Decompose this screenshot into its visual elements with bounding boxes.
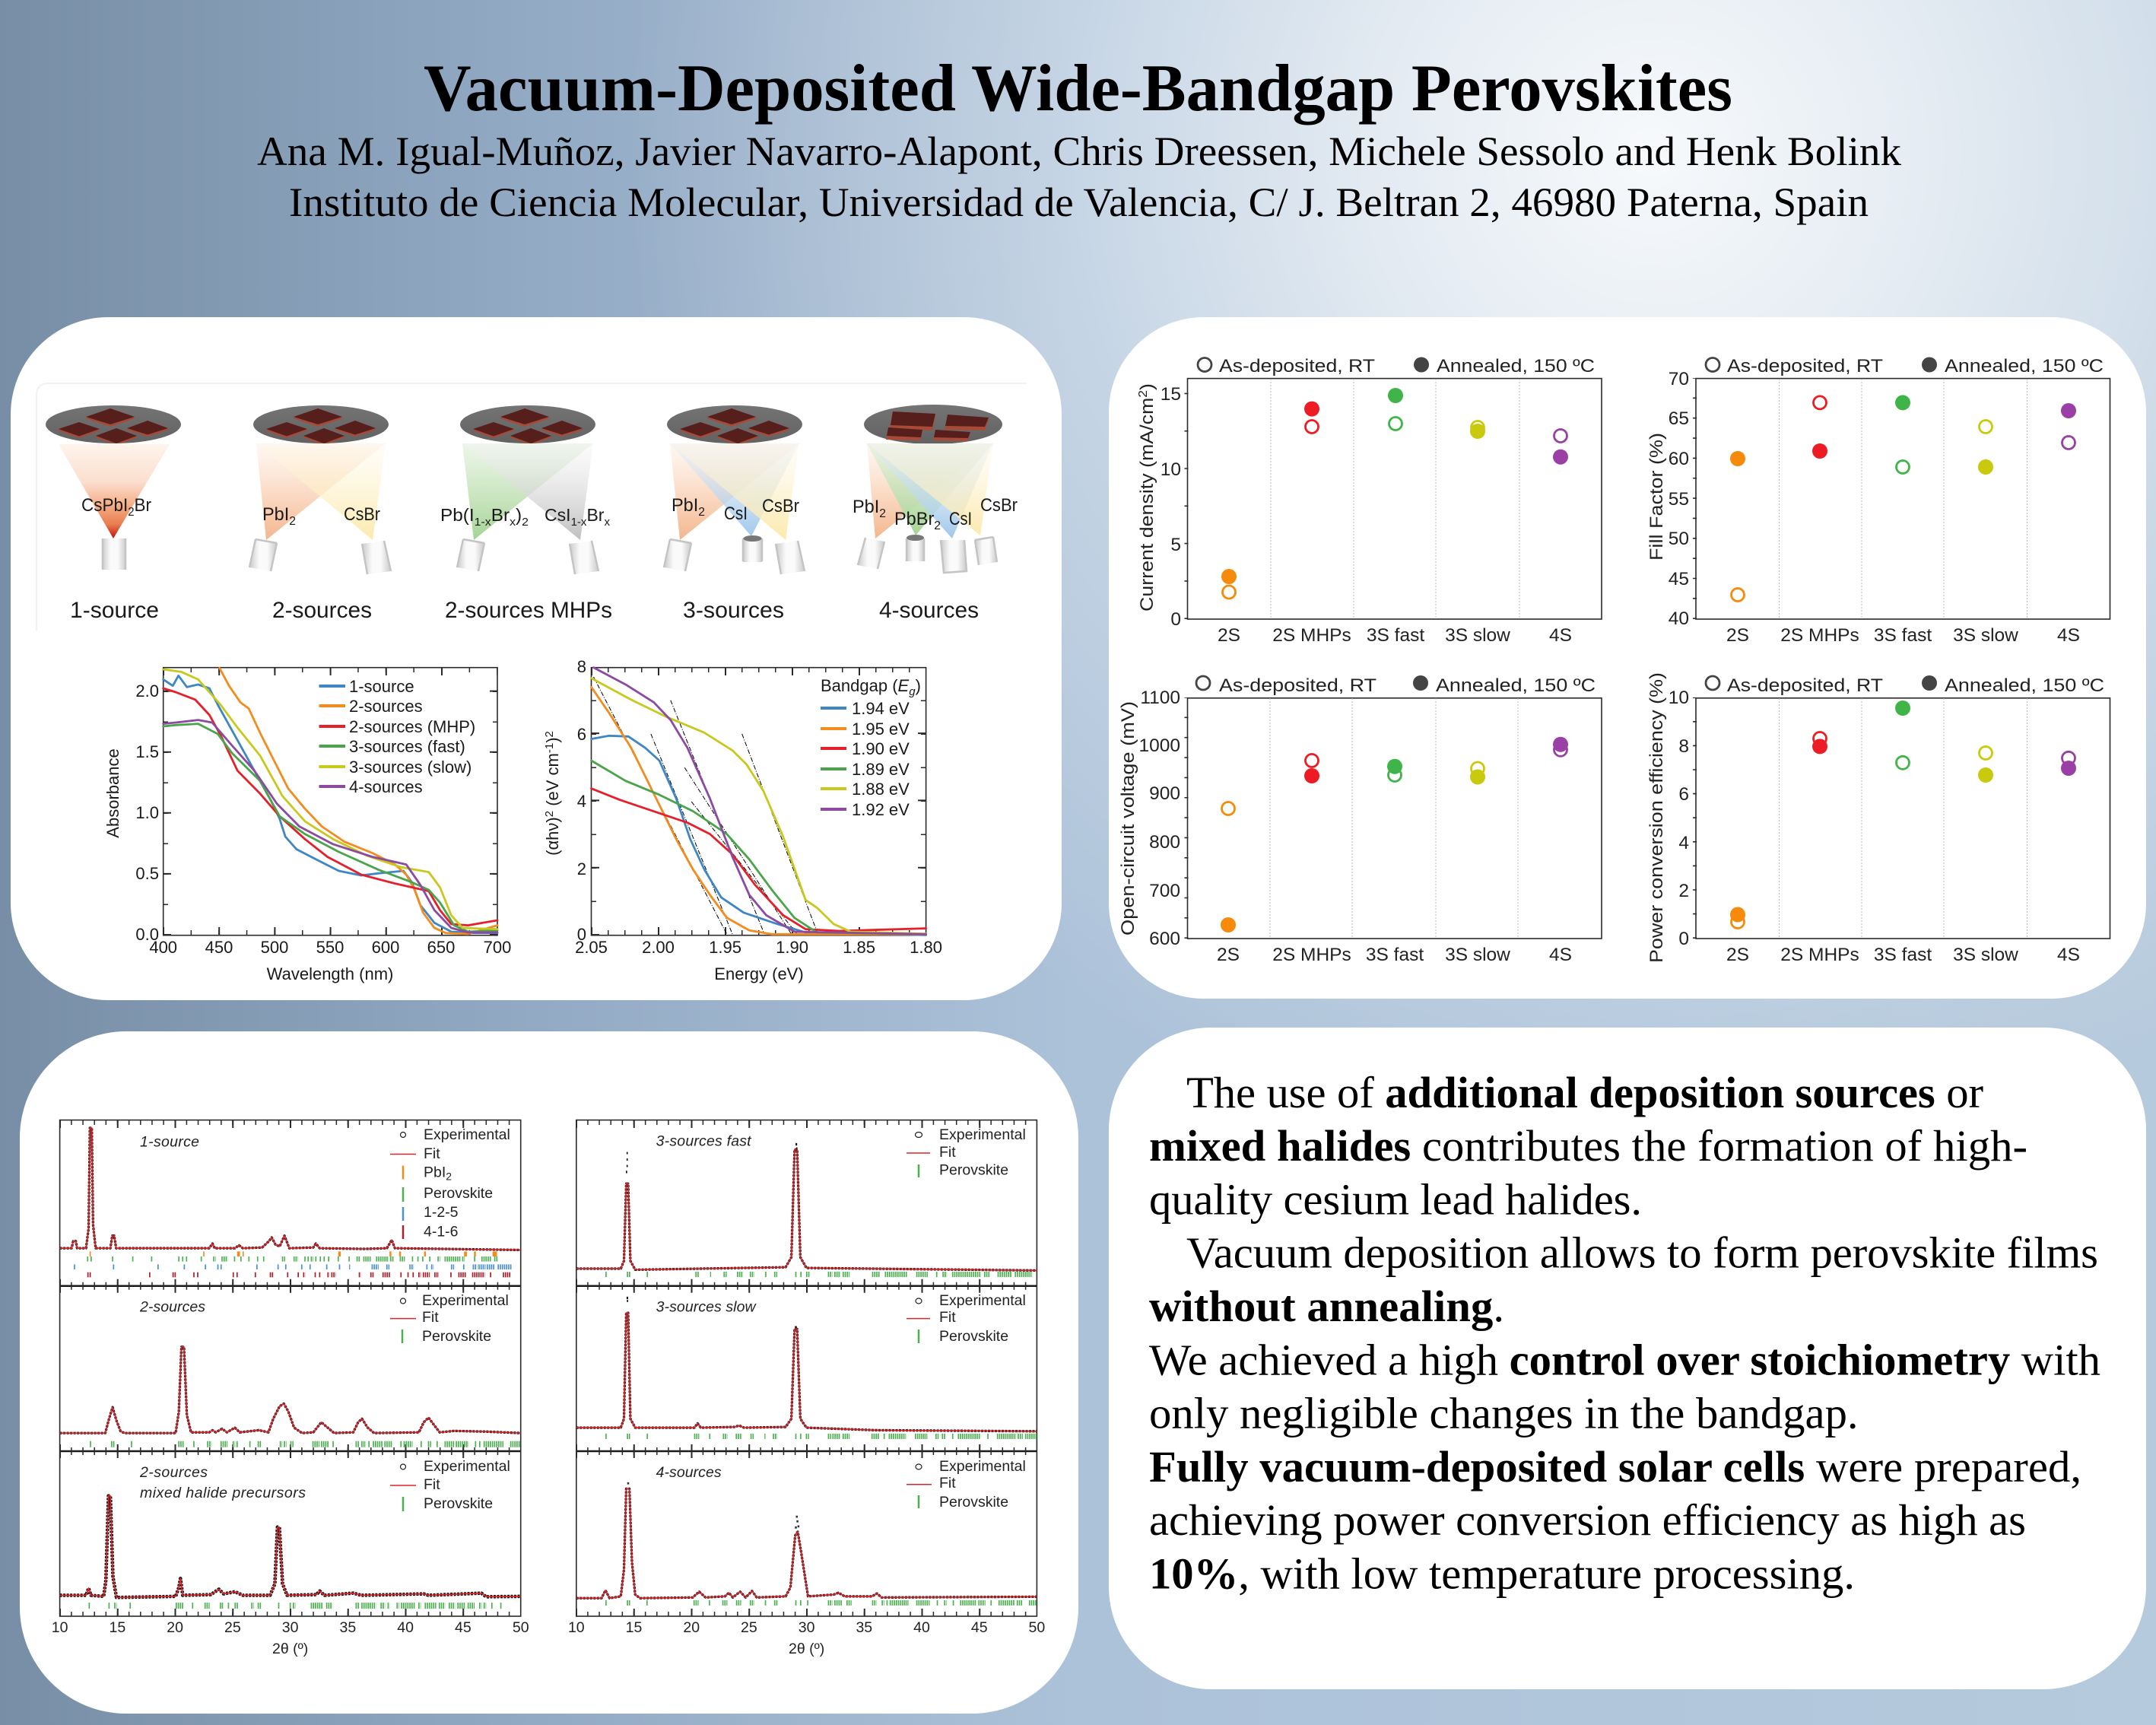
schematic: 1-source: 2 — [128, 506, 135, 519]
authors: Ana M. Igual-Muñoz, Javier Navarro-Alapont, Chris Dreessen, Michele Sessolo and Henk Bolink — [257, 129, 1901, 174]
XRD left labels and legends: 30 — [282, 1619, 299, 1636]
chart: open-circuit voltage — [1118, 675, 1602, 965]
pattern: 2-sources — [60, 1347, 521, 1444]
text block: conclusions: quality cesium lead halides. — [1149, 1174, 1642, 1225]
chart: absorbance vs wavelength: 0.0 — [135, 925, 159, 944]
XRD left labels and legends: mixed halide precursors — [140, 1485, 306, 1501]
chart: current density: As-deposited, RT — [1219, 356, 1375, 376]
text block: conclusions: We achieved a high control over stoichiometry with — [1149, 1336, 2100, 1384]
chart: fill factor: 45 — [1669, 569, 1689, 589]
chart: current density: 4S — [1549, 625, 1572, 646]
chart: open-circuit voltage: Open-circuit voltage (mV) — [1118, 701, 1138, 936]
chart: current density: Current density (mA/cm — [1137, 416, 1157, 612]
panel: conclusions text — [1109, 1028, 2146, 1689]
legend: bandgap: Bandgap (E — [821, 676, 909, 695]
chart: Tauc plot: (αhν) — [543, 817, 562, 856]
chart: current density: 5 — [1170, 535, 1181, 555]
chart: open-circuit voltage: 700 — [1149, 881, 1180, 901]
XRD right labels and legends: Perovskite — [939, 1161, 1008, 1178]
legend: absorbance: 1-source — [349, 677, 414, 696]
chart: fill factor: 65 — [1669, 408, 1689, 429]
XRD right labels and legends: Fit — [939, 1475, 956, 1492]
XRD left labels and legends: 2-sources — [139, 1299, 205, 1316]
pattern: 1-source — [60, 1128, 521, 1275]
chart: current density: 2S MHPs — [1272, 625, 1351, 646]
chart: power conversion efficiency: 3S fast — [1874, 945, 1932, 965]
chart: fill factor: 70 — [1669, 369, 1689, 389]
panel: device performance — [1109, 317, 2146, 999]
chart: absorbance vs wavelength: 650 — [427, 938, 455, 957]
chart: power conversion efficiency: 2S MHPs — [1780, 945, 1859, 965]
legend: bandgap: 1.89 eV — [852, 760, 910, 779]
chart: power conversion efficiency: 0 — [1678, 929, 1689, 949]
chart: fill factor: 55 — [1669, 489, 1689, 510]
schematic: 2-sources MHPs — [440, 405, 612, 623]
chart: fill factor: 50 — [1669, 529, 1689, 549]
chart: absorbance vs wavelength — [103, 668, 511, 983]
XRD right labels and legends: 25 — [741, 1619, 757, 1636]
text block: conclusions: achieving power conversion efficiency as high as — [1149, 1495, 2026, 1545]
chart: power conversion efficiency: 6 — [1678, 784, 1689, 805]
chart: absorbance vs wavelength: 400 — [149, 938, 177, 957]
chart: absorbance vs wavelength: 1.5 — [135, 742, 159, 761]
schematic: 3-sources — [664, 405, 805, 623]
XRD right labels and legends: 4-sources — [656, 1464, 722, 1481]
chart: power conversion efficiency: As-deposited, RT — [1727, 675, 1883, 696]
chart: absorbance vs wavelength: Wavelength (nm) — [267, 964, 393, 983]
legend: bandgap: 1.94 eV — [852, 699, 910, 718]
pattern: 4-sources — [576, 1482, 1037, 1603]
chart: current density: Annealed, 150 ºC — [1437, 356, 1595, 376]
chart: Tauc plot: 1.85 — [843, 938, 875, 957]
schematic: 1-source: CsPbI — [81, 495, 131, 516]
chart: power conversion efficiency: 4S — [2057, 945, 2080, 965]
XRD left labels and legends: PbI — [424, 1164, 446, 1181]
chart: open-circuit voltage: 800 — [1149, 832, 1180, 853]
XRD left labels and legends: 2-sources — [139, 1464, 208, 1481]
schematic: 3-sources: 2 — [698, 506, 705, 519]
chart: Tauc plot — [543, 657, 942, 983]
chart: open-circuit voltage: 1000 — [1138, 735, 1180, 756]
chart: open-circuit voltage: 2S MHPs — [1272, 945, 1351, 965]
chart: open-circuit voltage: 1100 — [1140, 688, 1180, 708]
XRD left labels and legends: 1-2-5 — [424, 1204, 459, 1221]
chart: fill factor: Fill Factor (%) — [1646, 433, 1667, 561]
chart: current density: ) — [1137, 383, 1157, 390]
chart: open-circuit voltage: Annealed, 150 ºC — [1436, 675, 1596, 696]
text block: conclusions: 10%, with low temperature processing. — [1149, 1549, 1855, 1599]
chart: XRD right column — [568, 1120, 1045, 1657]
chart: power conversion efficiency: 4 — [1678, 833, 1689, 853]
chart: fill factor: 60 — [1669, 449, 1689, 469]
chart: Tauc plot: 4 — [577, 792, 586, 811]
chart: current density — [1137, 356, 1602, 646]
chart: power conversion efficiency: 10 — [1669, 688, 1689, 708]
chart: current density: 3S fast — [1367, 625, 1424, 646]
XRD left labels and legends: Fit — [422, 1309, 439, 1326]
schematic: 2-sources: PbI — [262, 504, 290, 525]
XRD right labels and legends: 45 — [971, 1619, 988, 1636]
chart: absorbance vs wavelength: 550 — [316, 938, 344, 957]
chart: current density: 2 — [1137, 390, 1150, 398]
schematic: 2-sources MHPs: Pb(I — [440, 505, 472, 525]
chart: current density: 3S slow — [1445, 625, 1510, 646]
XRD left labels and legends: 1-source — [140, 1134, 199, 1151]
schematic: 2-sources MHPs: Br — [586, 505, 605, 525]
chart: fill factor: Annealed, 150 ºC — [1945, 356, 2104, 376]
XRD left labels and legends: 50 — [513, 1619, 529, 1636]
XRD right labels and legends: 3-sources slow — [656, 1299, 757, 1316]
chart: Tauc plot: 1.90 — [776, 938, 808, 957]
chart: open-circuit voltage: 2S — [1217, 945, 1240, 965]
chart: open-circuit voltage: 900 — [1149, 783, 1180, 804]
schematic: 2-sources MHPs: x — [510, 516, 516, 529]
XRD right labels and legends — [568, 1126, 1045, 1657]
chart: power conversion efficiency: 3S slow — [1953, 945, 2018, 965]
chart: Tauc plot: 1.95 — [709, 938, 741, 957]
XRD right labels and legends: 35 — [856, 1619, 872, 1636]
chart: Tauc plot: (eV cm — [543, 753, 562, 811]
chart: power conversion efficiency: Power conversion efficiency (%) — [1646, 672, 1667, 963]
XRD left labels and legends: Perovskite — [424, 1495, 493, 1512]
chart: fill factor: 3S slow — [1953, 625, 2018, 646]
XRD left labels and legends: 2 — [446, 1171, 452, 1183]
XRD right labels and legends: Fit — [939, 1144, 956, 1161]
XRD right labels and legends: Perovskite — [939, 1494, 1008, 1511]
XRD left labels and legends: 10 — [52, 1619, 68, 1636]
chart: Tauc plot: 2 — [543, 731, 556, 737]
panel: XRD patterns — [20, 1031, 1078, 1714]
legend: absorbance: 4-sources — [349, 777, 423, 796]
chart: fill factor — [1646, 356, 2110, 646]
schematic: 2-sources: CsBr — [344, 504, 380, 525]
XRD right labels and legends: Experimental — [939, 1292, 1026, 1309]
schematic: 2-sources MHPs: 2 — [522, 516, 529, 529]
chart: fill factor: 40 — [1669, 608, 1689, 629]
chart: Tauc plot: 2.00 — [642, 938, 675, 957]
schematic: 2-sources MHPs: 1-x — [475, 516, 491, 529]
schematic: 4-sources: 2 — [879, 507, 886, 520]
XRD left labels and legends: 40 — [397, 1619, 414, 1636]
XRD left labels and legends: Fit — [424, 1145, 440, 1162]
chart: power conversion efficiency: Annealed, 150 ºC — [1945, 675, 2104, 696]
schematic: 2-sources MHPs: 2-sources MHPs — [445, 598, 612, 623]
affiliation: Instituto de Ciencia Molecular, Universidad de Valencia, C/ J. Beltran 2, 46980 Paterna, Spain — [289, 179, 1869, 225]
chart: absorbance vs wavelength: 500 — [261, 938, 288, 957]
chart: absorbance vs wavelength: 1.0 — [135, 803, 159, 822]
schematic: 4-sources — [853, 405, 1018, 623]
XRD left labels and legends: Perovskite — [422, 1328, 491, 1345]
chart: absorbance vs wavelength: 0.5 — [135, 864, 159, 883]
chart: power conversion efficiency: 2S — [1726, 945, 1749, 965]
schematic: 2-sources MHPs: CsI — [545, 505, 570, 525]
text block: conclusions: without annealing. — [1149, 1282, 1504, 1331]
chart: current density: 10 — [1161, 459, 1181, 480]
schematic: 4-sources: CsBr — [980, 495, 1018, 516]
XRD left labels and legends: Fit — [424, 1476, 440, 1493]
XRD left labels and legends: 35 — [340, 1619, 356, 1636]
chart: absorbance vs wavelength: 450 — [205, 938, 233, 957]
schematic: 3-sources: 3-sources — [683, 598, 784, 623]
text block: conclusions: mixed halides contributes the formation of high- — [1149, 1121, 2027, 1171]
XRD right labels and legends: 40 — [913, 1619, 930, 1636]
XRD right labels and legends: Fit — [939, 1309, 956, 1326]
chart: Tauc plot: 1.80 — [910, 938, 942, 957]
chart: Tauc plot: ) — [543, 737, 562, 743]
schematic: 3-sources: CsBr — [762, 496, 799, 516]
pattern: 3-sources slow — [576, 1297, 1037, 1436]
XRD right labels and legends: Perovskite — [939, 1328, 1008, 1345]
chart: open-circuit voltage: 4S — [1549, 945, 1572, 965]
XRD left labels and legends: Experimental — [424, 1126, 510, 1143]
legend: absorbance — [319, 677, 475, 796]
legend: absorbance: 3-sources (slow) — [349, 758, 472, 777]
XRD right labels and legends: Experimental — [939, 1126, 1026, 1143]
text block: conclusions: Fully vacuum-deposited solar cells were prepared, — [1149, 1442, 2081, 1492]
chart: XRD left column — [52, 1120, 529, 1657]
legend: bandgap: 1.95 eV — [852, 720, 910, 739]
schematic: 4-sources: CsI — [949, 509, 972, 529]
XRD left labels and legends: 15 — [110, 1619, 125, 1636]
text block: conclusions: The use of additional deposition sources or — [1186, 1068, 1983, 1117]
chart: fill factor: 4S — [2057, 625, 2080, 646]
chart: Tauc plot: 0 — [577, 925, 586, 944]
XRD right labels and legends: Experimental — [939, 1458, 1026, 1475]
XRD left labels and legends: Experimental — [424, 1458, 510, 1475]
chart: Tauc plot: 2.05 — [575, 938, 608, 957]
legend: bandgap — [821, 676, 921, 819]
chart: current density: 0 — [1170, 609, 1181, 630]
XRD left labels and legends: Experimental — [422, 1292, 509, 1309]
XRD left labels and legends: 20 — [167, 1619, 183, 1636]
schematic: 3-sources: CsI — [724, 504, 748, 524]
legend: absorbance: 2-sources — [349, 697, 423, 716]
XRD left labels and legends: 25 — [224, 1619, 241, 1636]
chart: Tauc plot: -1 — [543, 743, 556, 753]
text block: conclusions — [1149, 1068, 2100, 1599]
legend: bandgap: ) — [916, 676, 921, 695]
chart: absorbance vs wavelength: Absorbance — [103, 748, 122, 838]
schematic: 1-source — [46, 405, 181, 623]
title: Vacuum-Deposited Wide-Bandgap Perovskites — [424, 52, 1732, 125]
XRD right labels and legends: 15 — [626, 1619, 642, 1636]
chart: open-circuit voltage: 3S slow — [1445, 945, 1510, 965]
chart: power conversion efficiency: 8 — [1678, 736, 1689, 757]
schematic: 4-sources: 4-sources — [879, 598, 979, 623]
schematic: 4-sources: 2 — [934, 519, 941, 532]
chart: fill factor: 3S fast — [1874, 625, 1932, 646]
chart: Tauc plot: 2 — [577, 859, 586, 878]
text block: conclusions: only negligible changes in the bandgap. — [1149, 1389, 1859, 1438]
XRD right labels and legends: 2θ (º) — [789, 1641, 824, 1657]
schematic: 2-sources MHPs: 1-x — [571, 516, 587, 529]
chart: open-circuit voltage: 3S fast — [1366, 945, 1424, 965]
XRD right labels and legends: 20 — [683, 1619, 700, 1636]
XRD left labels and legends: 4-1-6 — [424, 1223, 459, 1240]
legend: bandgap: 1.88 eV — [852, 780, 910, 799]
text block: conclusions: Vacuum deposition allows to form perovskite films — [1186, 1228, 2098, 1278]
chart: absorbance vs wavelength: 2.0 — [135, 681, 159, 700]
schematic: 2-sources MHPs: Br — [491, 505, 510, 525]
schematic: 4-sources: PbI — [853, 497, 880, 517]
XRD left labels and legends: 2θ (º) — [272, 1641, 308, 1657]
chart: Tauc plot: Energy (eV) — [714, 964, 804, 983]
schematic: 3-sources: PbI — [672, 495, 699, 516]
XRD right labels and legends: 3-sources fast — [656, 1133, 752, 1150]
XRD left labels and legends — [52, 1126, 529, 1657]
schematic: 1-source: Br — [135, 495, 151, 516]
chart: Tauc plot: 2 — [543, 811, 556, 817]
pattern: 2-sources mixed halide precursors — [60, 1496, 521, 1606]
legend: absorbance: 2-sources (MHP) — [349, 717, 475, 736]
schematic: 2-sources — [249, 405, 391, 623]
XRD left labels and legends: Perovskite — [424, 1185, 493, 1202]
chart: open-circuit voltage: As-deposited, RT — [1219, 675, 1376, 696]
chart: open-circuit voltage: 600 — [1149, 929, 1180, 949]
chart: fill factor: 2S — [1726, 625, 1749, 646]
chart: absorbance vs wavelength: 600 — [372, 938, 399, 957]
legend: bandgap: 1.92 eV — [852, 800, 910, 819]
chart: fill factor: 2S MHPs — [1780, 625, 1859, 646]
schematic: 2-sources: 2 — [289, 515, 296, 528]
schematic: 2-sources MHPs: ) — [516, 505, 522, 525]
pattern: 3-sources fast — [576, 1143, 1037, 1275]
schematic: 4-sources: PbBr — [894, 509, 935, 529]
legend: bandgap: g — [909, 685, 916, 698]
chart: fill factor: As-deposited, RT — [1727, 356, 1883, 376]
XRD right labels and legends: 30 — [799, 1619, 815, 1636]
chart: power conversion efficiency — [1646, 672, 2110, 965]
chart: absorbance vs wavelength: 700 — [484, 938, 511, 957]
schematic: 2-sources: 2-sources — [272, 598, 372, 623]
XRD right labels and legends: 10 — [568, 1619, 585, 1636]
XRD right labels and legends: 50 — [1029, 1619, 1045, 1636]
chart: Tauc plot: 6 — [577, 725, 586, 744]
chart: power conversion efficiency: 2 — [1678, 881, 1689, 901]
XRD left labels and legends: 45 — [455, 1619, 472, 1636]
chart: current density: 2S — [1218, 625, 1240, 646]
legend: absorbance: 3-sources (fast) — [349, 737, 465, 756]
legend: bandgap: 1.90 eV — [852, 739, 910, 758]
chart: current density: 15 — [1161, 384, 1181, 405]
schematic: 1-source: 1-source — [70, 598, 159, 623]
chart: Tauc plot: 8 — [577, 657, 586, 676]
schematic: 2-sources MHPs: x — [604, 516, 611, 529]
